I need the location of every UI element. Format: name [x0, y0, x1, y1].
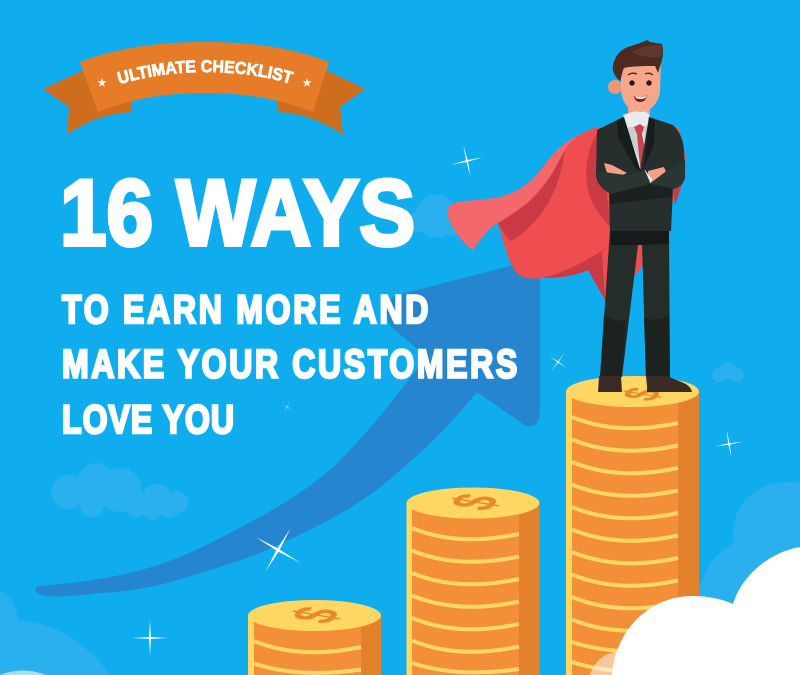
subheading: LOVE YOU: [62, 397, 234, 442]
headline: 16 WAYS: [60, 160, 415, 265]
tie: [634, 124, 648, 172]
shoes: [598, 376, 692, 392]
dollar sign: $: [437, 490, 514, 514]
coin stack: large: [566, 376, 699, 675]
main band: [80, 42, 329, 112]
shirt cuff: [643, 170, 652, 183]
right tail: [277, 71, 365, 135]
left tail: [43, 71, 132, 135]
cloud: white foreground: [590, 547, 800, 675]
subheading: MAKE YOUR CUSTOMERS: [62, 341, 517, 386]
cloud: bottom left: [0, 590, 110, 675]
legs: [600, 230, 670, 377]
coin stack: small: [248, 600, 381, 675]
eyes: [629, 80, 652, 86]
cloud: bottom right pale: [699, 482, 800, 675]
neck and shirt: [628, 100, 650, 122]
cape: [448, 127, 686, 302]
dollar sign: $: [278, 603, 355, 627]
arrow: [35, 261, 540, 596]
superhero businessman: [448, 40, 692, 392]
dollar sign: $: [611, 384, 674, 404]
cloud: small right: [712, 362, 744, 382]
smile: [634, 95, 647, 102]
cloud: left double: [51, 463, 188, 520]
sparkles: [132, 142, 745, 656]
hands: [604, 163, 666, 182]
crossed arms: [596, 160, 685, 194]
head: [608, 40, 663, 112]
coin stack: medium: [406, 488, 540, 675]
banner stars: [98, 78, 312, 89]
hair: [613, 40, 663, 81]
banner text: [100, 72, 310, 90]
subheading: TO EARN MORE AND: [62, 287, 428, 332]
cloud: behind headline: [408, 195, 469, 237]
banner stars: ★: [303, 78, 312, 89]
ribbon banner: ULTIMATE CHECKLIST: [116, 60, 294, 84]
banner stars: ★: [98, 78, 107, 89]
jacket: [596, 117, 685, 231]
subheading: [62, 287, 517, 442]
ribbon banner: [43, 42, 365, 135]
